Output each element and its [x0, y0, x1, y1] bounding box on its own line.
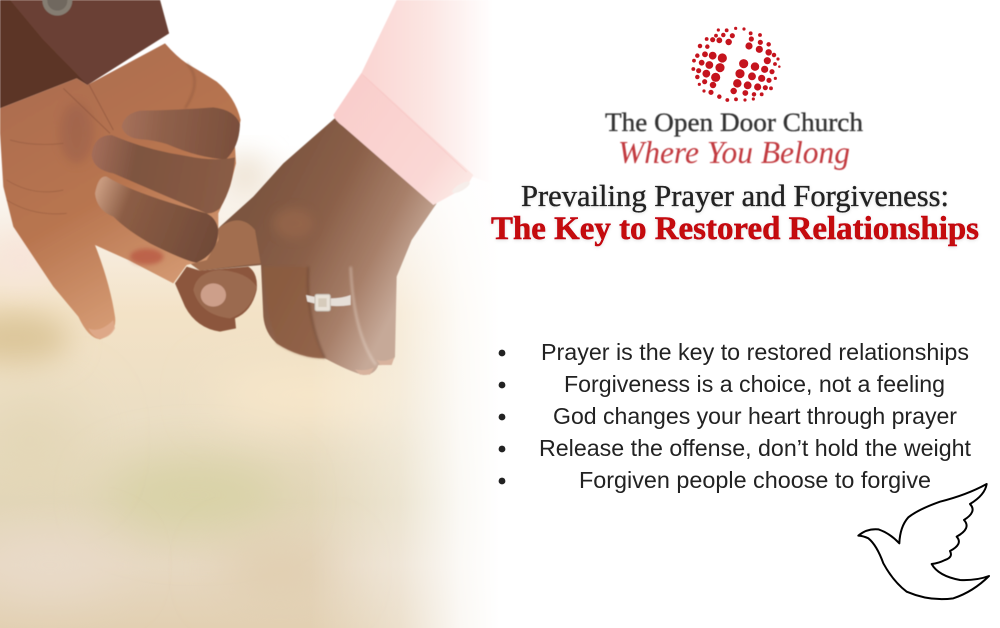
finger 3 [95, 177, 218, 263]
heading line 2: The Key to Restored Relationships [491, 211, 979, 247]
pinky clasp [175, 267, 257, 332]
pink sleeve [333, 0, 500, 205]
man's hand [0, 43, 257, 339]
logo: dotted globe with cross [692, 27, 780, 101]
finger 2 [92, 135, 235, 213]
heading line 1: Prevailing Prayer and Forgiveness: [521, 178, 949, 213]
bullet 4: Release the offense, don’t hold the weight [539, 435, 971, 461]
logo tagline: Where You Belong [618, 134, 850, 170]
woman's hand [190, 117, 437, 375]
bullet 3: God changes your heart through prayer [553, 403, 957, 429]
bullet 5: Forgiven people choose to forgive [579, 467, 931, 493]
bullet list [499, 339, 971, 493]
icon: dove outline [858, 484, 989, 599]
man's sleeve [0, 0, 169, 108]
photo panel: holding hands [0, 0, 500, 628]
logo name: The Open Door Church [605, 108, 863, 137]
finger 1 [122, 107, 240, 159]
bullet 2: Forgiveness is a choice, not a feeling [564, 371, 945, 397]
bullet 1: Prayer is the key to restored relationships [541, 339, 969, 365]
